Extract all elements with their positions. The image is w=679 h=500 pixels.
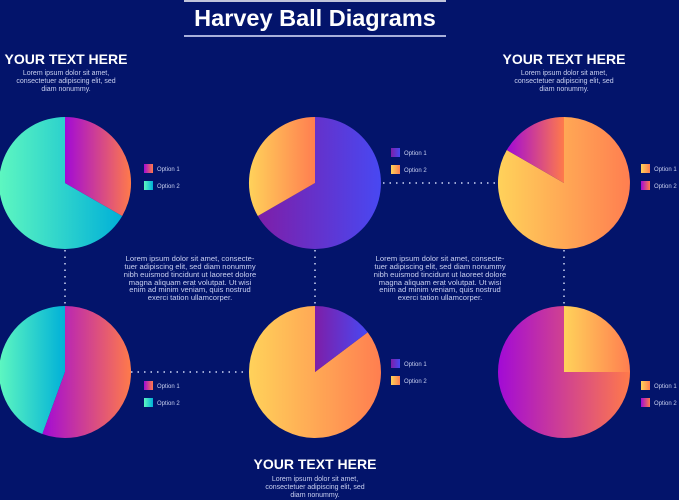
text block: top right xyxy=(503,51,625,93)
legend 6: Option 2 xyxy=(654,401,677,407)
legend 6 xyxy=(641,381,677,407)
legend 6: Option 1 xyxy=(654,384,677,390)
legend 3: Option 2 xyxy=(654,184,677,190)
legend 5: Option 1 xyxy=(404,362,427,368)
paragraph left: Lorem ipsum dolor sit amet, consecte- xyxy=(126,254,255,263)
paragraph left: nibh euismod tincidunt ut laoreet dolore xyxy=(124,270,256,279)
legend 2 xyxy=(391,148,427,174)
pie 3 xyxy=(498,117,630,249)
title: Harvey Ball Diagrams xyxy=(194,5,436,31)
text block: bottom center: Lorem ipsum dolor sit amet, xyxy=(272,476,358,483)
paragraph right: nibh euismod tincidunt ut laoreet dolore xyxy=(374,270,506,279)
text block: top left: diam nonummy. xyxy=(41,86,91,93)
paragraph right: enim ad minim veniam, quis nostrud xyxy=(379,285,501,294)
paragraph left: exerci tation ullamcorper. xyxy=(148,293,232,302)
paragraph left xyxy=(124,254,256,302)
legend 5: Option 2 xyxy=(404,379,427,385)
paragraph left: magna aliquam erat volutpat. Ut wisi xyxy=(129,278,252,287)
paragraph left: enim ad minim veniam, quis nostrud xyxy=(129,285,251,294)
text block: bottom center: consectetuer adipiscing elit, sed xyxy=(265,484,365,491)
legend 5 xyxy=(391,359,427,385)
text block: top right: diam nonummy. xyxy=(539,86,589,93)
legend 1: Option 2 xyxy=(157,184,180,190)
legend 1 xyxy=(144,164,180,190)
pie 1 xyxy=(0,117,131,249)
legend 3: Option 1 xyxy=(654,167,677,173)
paragraph right: exerci tation ullamcorper. xyxy=(398,293,482,302)
text block: bottom center: YOUR TEXT HERE xyxy=(254,456,376,472)
pie 4 xyxy=(0,306,131,438)
paragraph right xyxy=(374,254,506,302)
text block: top right: YOUR TEXT HERE xyxy=(503,51,625,67)
legend 1: Option 1 xyxy=(157,167,180,173)
text block: top right: Lorem ipsum dolor sit amet, xyxy=(521,70,607,77)
paragraph right: tuer adipiscing elit, sed diam nonummy xyxy=(374,262,506,271)
pie 6 xyxy=(498,306,630,438)
text block: top left xyxy=(5,51,127,93)
legend 4: Option 2 xyxy=(157,401,180,407)
text block: bottom center xyxy=(254,456,376,499)
text block: top left: Lorem ipsum dolor sit amet, xyxy=(23,70,109,77)
legend 4 xyxy=(144,381,180,407)
legend 2: Option 2 xyxy=(404,168,427,174)
paragraph left: tuer adipiscing elit, sed diam nonummy xyxy=(124,262,256,271)
text block: bottom center: diam nonummy. xyxy=(290,492,340,499)
text block: top left: YOUR TEXT HERE xyxy=(5,51,127,67)
legend 2: Option 1 xyxy=(404,151,427,157)
pie 2 xyxy=(249,117,381,249)
paragraph right: Lorem ipsum dolor sit amet, consecte- xyxy=(376,254,505,263)
text block: top left: consectetuer adipiscing elit, sed xyxy=(16,78,116,85)
text block: top right: consectetuer adipiscing elit, sed xyxy=(514,78,614,85)
pie 5 xyxy=(249,306,381,438)
paragraph right: magna aliquam erat volutpat. Ut wisi xyxy=(379,278,502,287)
legend 4: Option 1 xyxy=(157,384,180,390)
legend 3 xyxy=(641,164,677,190)
